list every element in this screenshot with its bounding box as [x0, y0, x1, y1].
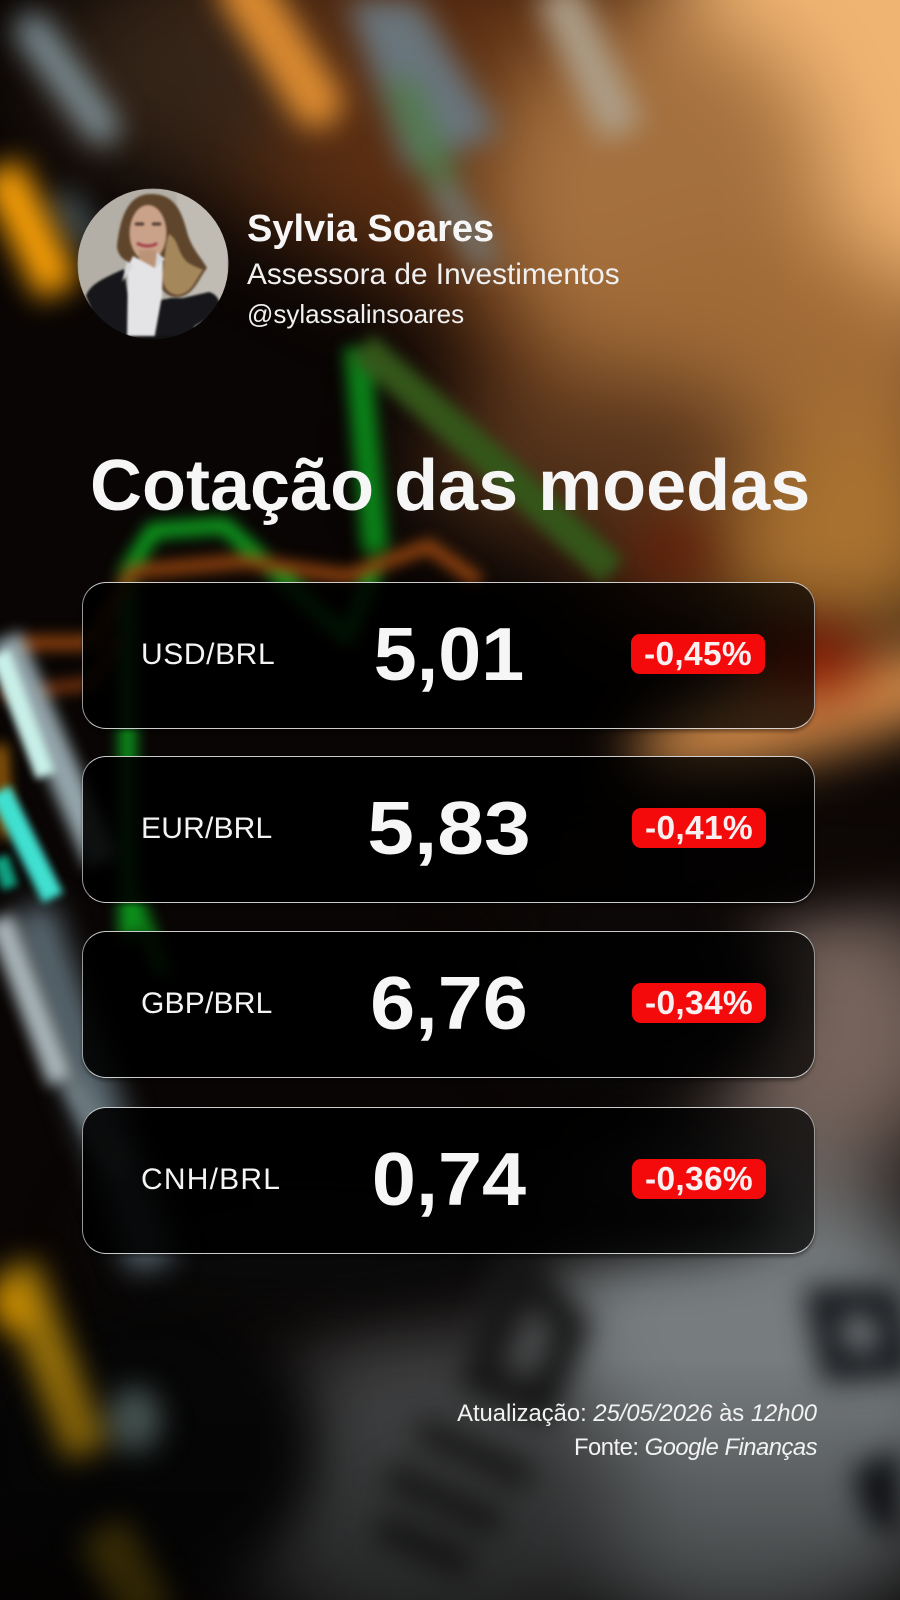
- icon: portrait photo: [78, 188, 228, 340]
- handle: @sylassalinsoares: [247, 299, 464, 329]
- pair label: GBP/BRL: [141, 987, 272, 1020]
- footer: update date and source: [457, 1400, 817, 1461]
- change badge: -0,45%: [644, 636, 752, 673]
- title: Cotação das moedas: [90, 446, 810, 526]
- footer: update date and source: Atualização: 25/05/2026 às 12h00: [457, 1400, 817, 1427]
- name: Sylvia Soares: [247, 208, 494, 250]
- footer: update date and source: Fonte: Google Finanças: [574, 1434, 817, 1461]
- panel: CNH/BRL quote: [82, 1107, 815, 1254]
- panel: GBP/BRL quote: [82, 931, 815, 1078]
- role: Assessora de Investimentos: [247, 258, 620, 291]
- panel: EUR/BRL quote: [82, 756, 815, 903]
- pair label: EUR/BRL: [141, 812, 272, 845]
- profile header: [78, 188, 620, 340]
- pair label: USD/BRL: [141, 638, 275, 671]
- change badge: -0,34%: [645, 985, 753, 1022]
- pair label: CNH/BRL: [141, 1163, 281, 1196]
- change badge: -0,41%: [645, 810, 753, 847]
- rate value: 6,76: [370, 961, 528, 1045]
- rate value: 0,74: [372, 1137, 526, 1221]
- rate value: 5,01: [374, 612, 524, 696]
- rate value: 5,83: [367, 786, 531, 870]
- change badge: -0,36%: [645, 1161, 753, 1198]
- panel: USD/BRL quote: [82, 582, 815, 729]
